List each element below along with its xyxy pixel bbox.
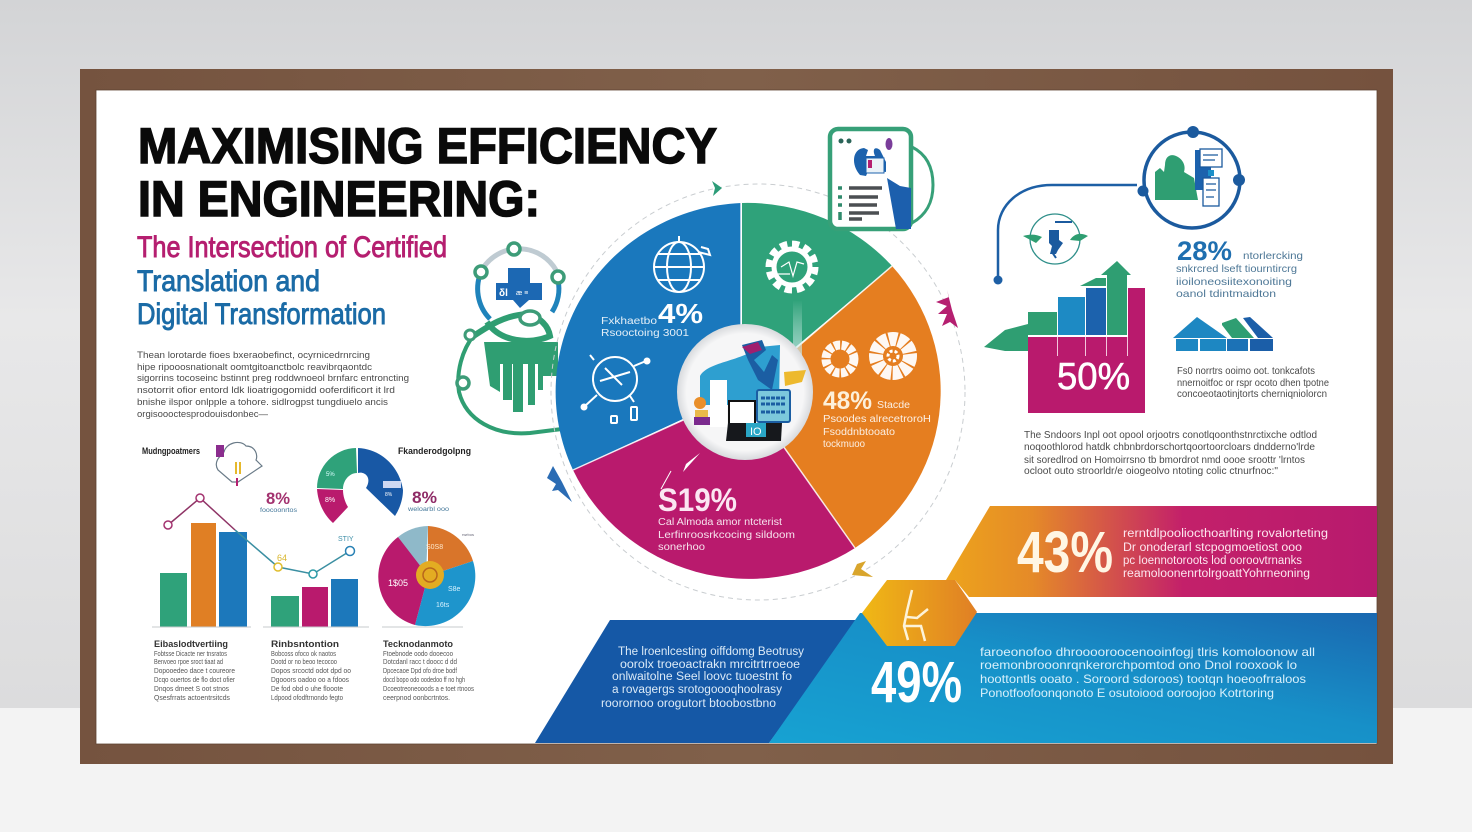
- banner: left blue: oorolx troeoactrakn mrcitrtrroeoe: [620, 659, 800, 671]
- text column 3: [383, 639, 474, 702]
- intro paragraph: orgisoooctesprodouisdonbec—: [137, 409, 268, 420]
- right paragraph: sit soredlrod on Homoirrsno tb bmordrot nmd oooe sroottr 'lrntos: [1024, 455, 1305, 466]
- text column 2: Dgooors oadoo oo a fdoos: [271, 675, 349, 684]
- dashed orbit with arrows: [547, 181, 965, 600]
- text column 3: Dotcdanl racc t doocc d dd: [383, 657, 457, 666]
- stat: right 8%: weloarbl ooo: [407, 506, 449, 513]
- banner: 49%: hoottontls ooato . Soroord sdoroos) tootqn hoeoofrraloos: [980, 672, 1306, 686]
- intro paragraph: nsotorrit ofior entord ldk lioatrigogomidd ooferdificort it lrd: [137, 385, 395, 396]
- half donut chart: 8%: [385, 492, 393, 498]
- banner: 49%: Ponotfoofoonqonoto E osutoiood ooroojoo Kotrtoring: [980, 686, 1274, 700]
- text column 3: Tecknodanmoto: [383, 639, 454, 649]
- pie label: orange: Psoodes alrecetroroH: [823, 414, 931, 425]
- segment: orange: [745, 266, 941, 548]
- text column 1: Dopooedeo dace t coureore: [154, 666, 235, 675]
- segment: magenta: [573, 392, 855, 579]
- banner: 43%: pc Ioennotoroots lod ooroovtrnanks: [1123, 555, 1302, 567]
- stepped growth chart: 50%: [1057, 356, 1130, 398]
- text column 1: Eibaslodtvertiing: [154, 639, 228, 649]
- subtitle: [137, 231, 447, 331]
- connector line: [994, 185, 1137, 284]
- right paragraph: noqoothlorod hatdk chbnbrdorschortqoortoorcloars dndderno'lrde: [1024, 442, 1315, 453]
- intro paragraph: bnishe ilspor onlpple a tohore. sidlrogpst tungdiuelo ancis: [137, 397, 388, 408]
- stat: right 8%: [407, 488, 449, 513]
- banner: 43%: [946, 506, 1377, 597]
- banner: 43%: Dr onoderarl stcpogmoetiost ooo: [1123, 542, 1302, 554]
- right paragraph: ocloot outo stroorldr/e oiogeolvo ntoting colic ctnurfnoc:": [1024, 466, 1278, 477]
- hexagon badge with icon: [862, 580, 977, 646]
- half donut chart: 8%: [325, 497, 335, 504]
- wooden frame: [80, 69, 1393, 764]
- right paragraph: The Sndoors Inpl oot opool orjootrs conotlqoonthstnrctixche odtlod: [1024, 430, 1317, 441]
- subtitle: Translation and: [137, 265, 320, 298]
- text column 2: Dootd or no beoo tecocoo: [271, 657, 337, 666]
- pie label: blue: 4%: [658, 298, 703, 329]
- icon: person with documents: [1138, 126, 1245, 228]
- half donut chart: 5%: [326, 472, 335, 478]
- icon: document and hand: [830, 129, 933, 229]
- text column 1: [154, 639, 235, 702]
- pie label: orange: tockmuoo: [823, 439, 865, 450]
- arrow: green: [712, 181, 722, 196]
- text column 2: De fod obd o uhe flooote: [271, 684, 343, 693]
- hub: digital workstation: IO: [750, 426, 762, 438]
- central pie chart: [556, 203, 941, 579]
- stepped growth chart: [984, 261, 1145, 413]
- stat: left 8%: 8%: [266, 489, 290, 508]
- banner: 49%: [769, 613, 1377, 743]
- half donut chart: [317, 448, 403, 523]
- pie label: orange: Stacde: [877, 400, 910, 411]
- pie label: magenta: sonerhoo: [658, 542, 705, 553]
- text column 2: Ldpood ofodftrnondo fegto: [271, 693, 343, 702]
- intro paragraph: [137, 350, 409, 420]
- segment: blue: [556, 203, 741, 470]
- title: MAXIMISING EFFICIENCY: [138, 118, 717, 174]
- banner: left blue: a rovagergs srotogoooqhoolrasy: [612, 684, 782, 696]
- right short text: concoeotaotinjtorts cherniqniolorcn: [1177, 389, 1327, 400]
- stat: 28%: oanol tdintmaidton: [1176, 288, 1276, 300]
- icon: chair outline: [904, 590, 928, 641]
- icon: green hand and network: [457, 243, 570, 433]
- text column 3: Dpcecaoe Dpd ofo droe bodf: [383, 666, 458, 675]
- pie label: blue: [601, 298, 703, 339]
- small pie chart: rwrbos: [462, 532, 474, 537]
- label: right heading: Fkanderodgolpng: [398, 446, 471, 456]
- pie label: magenta: S19%: [658, 482, 737, 518]
- bar chart with trend line: STIY: [338, 536, 354, 543]
- pie label: orange: [823, 387, 931, 450]
- stat: 28%: [1176, 236, 1303, 300]
- stat: 28%: ntorlercking: [1243, 250, 1303, 262]
- text column 1: Dnqos dmeet S oot stnos: [154, 684, 229, 693]
- hub: digital workstation: [677, 324, 813, 460]
- title: [138, 118, 717, 227]
- text column 1: Dcqo ouertos de flo doct ofier: [154, 675, 235, 684]
- mini chart group: [142, 442, 475, 702]
- arrow: magenta: [936, 290, 958, 328]
- bar chart with trend line: [152, 494, 463, 627]
- text column 2: Dopos srcoctd odot dpd oo: [271, 666, 351, 675]
- icon: gear: [770, 245, 814, 289]
- icon: green hand and network: æ ≡: [516, 290, 528, 297]
- text column 1: Fobtsse Dicacte ner tnsratos: [154, 649, 227, 658]
- subtitle: Digital Transformation: [137, 298, 386, 331]
- intro paragraph: hipe ripooosnationalt oomtgitoanctbolc reavibrqaontdc: [137, 362, 372, 373]
- stat: 28%: iioiloneosiitexonoiting: [1176, 276, 1292, 288]
- stat: right 8%: 8%: [412, 488, 437, 507]
- right short text: Fs0 norrtrs ooimo oot. tonkcafots: [1177, 366, 1315, 377]
- arrow: blue: [547, 466, 572, 502]
- text column 1: Qsesfrrats actoentrsitcds: [154, 693, 230, 702]
- bar chart with trend line: 64: [277, 553, 287, 563]
- intro paragraph: sigorrins tocoseinc bstinnt preg roddwnoeol brnfarc entroncting: [137, 373, 409, 384]
- banner: 43%: rerntdlpooliocthoarlting rovalorteting: [1123, 528, 1328, 540]
- pie label: blue: Fxkhaetbo: [601, 316, 658, 327]
- banner: left blue: [535, 620, 859, 743]
- text column 3: docd bopo odo oodedoo ff no hgh: [383, 675, 465, 684]
- arrow: gold: [852, 561, 873, 577]
- icon: orange blobs: [826, 339, 910, 373]
- small pie chart: 16ts: [436, 602, 450, 609]
- text column 2: Bobcoss ofoco ok naotos: [271, 649, 336, 658]
- icon: globe: [654, 236, 710, 292]
- label: left heading: Mudngpoatmers: [142, 446, 200, 456]
- banner: 49%: faroeonofoo dhrooooroocenooinfogj tlris komoloonow all: [980, 645, 1315, 659]
- text column 3: Ftoebnode oodo dooecoo: [383, 649, 453, 658]
- banner: 49%: roemonbrooonrqnkerorchpomtod ono Dnol rooxook lo: [980, 658, 1297, 672]
- stat: 28%: snkrcred lseft tiourntircrg: [1176, 263, 1297, 275]
- icon: satellite: [582, 355, 650, 423]
- pie label: orange: 48%: [823, 387, 872, 415]
- banner: left blue: The lroenlcesting oiffdomg Beotrusy: [618, 646, 804, 658]
- text column 1: Benvoeo rpoe sroct tiaat ad: [154, 657, 223, 666]
- small pie chart: [378, 526, 475, 626]
- pie label: magenta: [658, 453, 795, 553]
- small pie chart: S8e: [448, 586, 461, 593]
- stat: left 8%: [260, 489, 298, 514]
- text column 2: Rinbsntontion: [271, 639, 339, 649]
- pie label: orange: Fsoddnbtooato: [823, 427, 895, 438]
- banner: 43%: 43%: [1017, 520, 1113, 585]
- banner: 43%: reamoloonenrtolrgoattYohrneoning: [1123, 568, 1310, 580]
- right paragraph: [1024, 430, 1317, 477]
- subtitle: The Intersection of Certified: [137, 231, 447, 264]
- small pie chart: 1$05: [388, 578, 408, 588]
- text column 3: Dcoeotreoneooods a e toet rtnoos: [383, 684, 474, 693]
- stat: 28%: 28%: [1177, 236, 1232, 266]
- icon: green hand and network: δl: [499, 288, 508, 299]
- right short text: nnernoitfoc or rspr ocoto dhen tpotne: [1177, 378, 1329, 389]
- pie label: magenta: Lerfinroosrkcocing sildoom: [658, 530, 795, 541]
- stat: left 8%: foocoonrtos: [260, 507, 298, 514]
- icon: cloud head: [216, 442, 262, 486]
- segment: green: [742, 203, 892, 392]
- title: IN ENGINEERING:: [138, 171, 540, 227]
- intro paragraph: Thean lorotarde fioes bxeraobefinct, ocyrnicedrnrcing: [137, 350, 370, 361]
- icon: roof blocks: [1173, 317, 1273, 351]
- pie label: blue: Rsooctoing 3001: [601, 328, 690, 339]
- text column 3: ceerpnod oonbcrtntos.: [383, 693, 450, 702]
- banner: 49%: 49%: [871, 650, 962, 715]
- pie label: magenta: Cal Almoda amor ntcterist: [658, 517, 782, 528]
- banner: left blue: roorornoo orogutort btoobostbno: [601, 698, 776, 710]
- text column 2: [271, 639, 351, 702]
- banner: left blue: onlwaitolne Seel loovc tuoestnt fo: [612, 671, 792, 683]
- icon: small globe tool: [1023, 214, 1088, 264]
- small pie chart: S0S8: [426, 544, 443, 551]
- right short text: [1177, 366, 1329, 400]
